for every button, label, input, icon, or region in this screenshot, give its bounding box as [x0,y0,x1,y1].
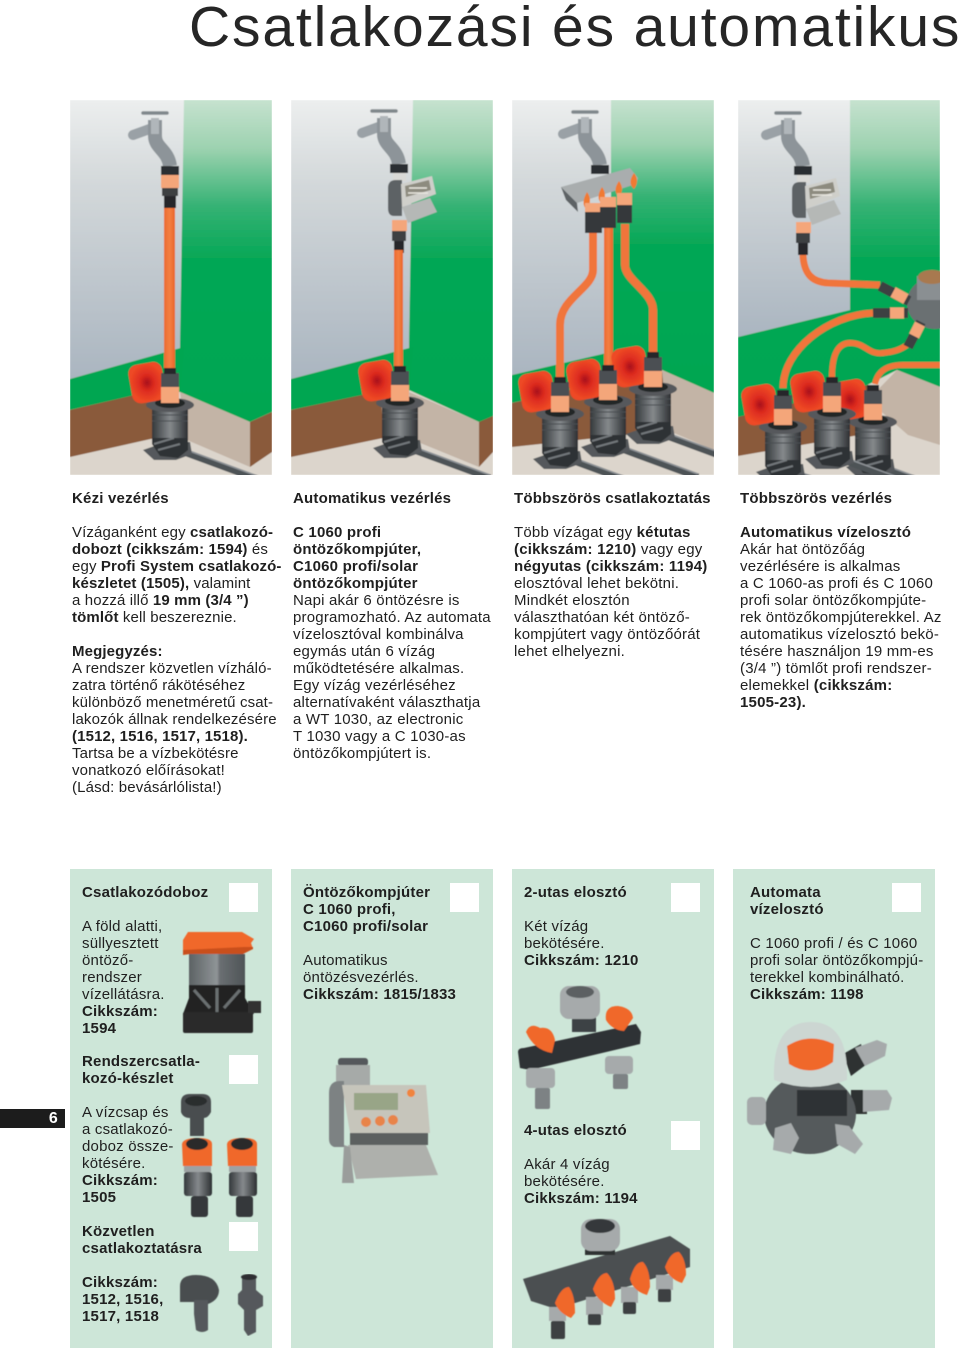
checkbox: direct connection [229,1222,258,1251]
product text: Rendszercsatlakozó-készlet: kozó-készlet [82,1070,174,1087]
text: multiple control: elemekkel (cikkszám: [740,677,892,694]
text: manual control: tömlőt kell beszereznie. [72,609,237,626]
text: manual control: zatra történő rákötéséhez [72,677,245,694]
product image: connector set [180,1093,258,1218]
text: manual control: Tartsa be a vízbekötésre [72,745,239,762]
text: automatic control: öntözőkompjútert is. [293,745,431,762]
text: multiple control [740,524,942,711]
page number tab [0,1109,65,1128]
text: manual control: Vízáganként egy csatlakozó- [72,524,273,541]
product text: Közvetlen csatlakoztatásra: 1517, 1518 [82,1308,159,1325]
product text: Automata vízelosztó: Cikkszám: 1198 [750,986,864,1003]
product text: Automata vízelosztó: vízelosztó [750,901,824,918]
product text: Automata vízelosztó: Automata [750,884,821,901]
text: manual control: A rendszer közvetlen vízháló- [72,660,272,677]
product text: Csatlakozódoboz: A föld alatti, [82,918,162,935]
text: manual control: (Lásd: bevásárlólista!) [72,779,222,796]
checkbox: irrigation computer [450,883,479,912]
text: automatic control: programozható. Az automata [293,609,491,626]
text: multiple connection: (cikkszám: 1210) vagy egy [514,541,702,558]
product text: 4-utas elosztó [524,1122,638,1207]
product text: Automata vízelosztó: terekkel kombinálható. [750,969,904,986]
product text: Közvetlen csatlakoztatásra: Cikkszám: [82,1274,158,1291]
product image: automatic distributor [746,1022,892,1155]
product text: 2-utas elosztó: bekötésére. [524,935,605,952]
product text: Rendszercsatlakozó-készlet: doboz össze- [82,1138,174,1155]
text: multiple connection: elosztóval lehet bekötni. [514,575,679,592]
product image: direct connectors [179,1274,264,1336]
text: manual control: Megjegyzés: [72,643,163,660]
illustration: multiple connection with 4-way manifold [512,100,714,475]
text: manual control: készletet (1505), valamint [72,575,250,592]
product text: 4-utas elosztó: 4-utas elosztó [524,1122,627,1139]
panel: irrigation computer [291,869,493,1348]
text: manual control: vonatkozó előírásokat! [72,762,225,779]
product text: 2-utas elosztó: 2-utas elosztó [524,884,627,901]
panel: connection boxes [70,869,272,1348]
product text: Rendszercsatlakozó-készlet: A vízcsap és [82,1104,169,1121]
product image: connection box [182,931,262,1034]
product text: 4-utas elosztó: Akár 4 vízág [524,1156,610,1173]
panel: automatic distributor [733,869,935,1348]
product text: Rendszercsatlakozó-készlet: 1505 [82,1189,116,1206]
product text: Automata vízelosztó: profi solar öntözőkompjú- [750,952,923,969]
text: multiple connection: Több vízágat egy kétutas [514,524,691,541]
text: automatic control: öntözőkompjúter, [293,541,421,558]
product text: Öntözőkompjúter: C 1060 profi, [303,901,396,918]
product text: Automata vízelosztó: C 1060 profi / és C 1060 [750,935,917,952]
checkbox: connector set [229,1055,258,1084]
product text: Csatlakozódoboz: Csatlakozódoboz [82,884,208,901]
text: multiple control: 1505-23). [740,694,806,711]
text: automatic control: vízelosztóval kombinálva [293,626,464,643]
text: multiple control: (3/4 ”) tömlőt profi rendszer- [740,660,932,677]
product text: Csatlakozódoboz: Cikkszám: [82,1003,158,1020]
heading: manual control: Kézi vezérlés [72,490,169,507]
product text: Öntözőkompjúter: Automatikus [303,952,388,969]
heading: automatic control: Automatikus vezérlés [293,490,451,507]
checkbox: connection box [229,883,258,912]
text: multiple control: Automatikus vízelosztó [740,524,911,541]
text: multiple control: profi solar öntözőkompjúte- [740,592,926,609]
product text: Öntözőkompjúter: öntözésvezérlés. [303,969,419,986]
page number tab: 6 [49,1110,58,1127]
product text: Csatlakozódoboz: öntöző- [82,952,133,969]
product text: Öntözőkompjúter [303,884,456,1003]
product text: Csatlakozódoboz: 1594 [82,1020,116,1037]
product text: Közvetlen csatlakoztatásra: 1512, 1516, [82,1291,163,1308]
text: multiple connection: kompjútert vagy öntözőórát [514,626,700,643]
illustration: automatic control with timer [291,100,493,475]
product text: 2-utas elosztó: Két vízág [524,918,588,935]
text: multiple control: Akár hat öntözőág [740,541,865,558]
illustration: manual control with single hose [70,100,272,475]
checkbox: 2-way distributor [671,883,700,912]
text: automatic control: a WT 1030, az electronic [293,711,463,728]
text: automatic control: C 1060 profi [293,524,381,541]
text: multiple control: a C 1060-as profi és C 1060 [740,575,933,592]
product image: 2-way distributor [517,985,642,1110]
product text: Rendszercsatlakozó-készlet: a csatlakozó- [82,1121,173,1138]
heading: multiple control: Többszörös vezérlés [740,490,892,507]
product text: Csatlakozódoboz: vízellátásra. [82,986,165,1003]
product text: Rendszercsatlakozó-készlet: Rendszercsatla- [82,1053,200,1070]
text: manual control: dobozt (cikkszám: 1594) és [72,541,268,558]
product text: Közvetlen csatlakoztatásra: Közvetlen [82,1223,155,1240]
product text: Csatlakozódoboz: rendszer [82,969,142,986]
text: manual control: egy Profi System csatlakozó- [72,558,282,575]
product text: 2-utas elosztó [524,884,639,969]
text: automatic control: T 1030 vagy a C 1030-as [293,728,466,745]
text: automatic control [293,524,491,762]
product text: Öntözőkompjúter: Cikkszám: 1815/1833 [303,986,456,1003]
text: automatic control: egymás után 6 vízág [293,643,435,660]
text: multiple connection: Mindkét elosztón [514,592,630,609]
product text: Rendszercsatlakozó-készlet [82,1053,200,1206]
heading: multiple connection: Többszörös csatlakoztatás [514,490,711,507]
text: manual control: a hozzá illő 19 mm (3/4 ”) [72,592,249,609]
product text: Öntözőkompjúter: C1060 profi/solar [303,918,428,935]
product text: Öntözőkompjúter: Öntözőkompjúter [303,884,430,901]
text: multiple control: rek öntözőkompjúterekkel. Az [740,609,942,626]
product text: Csatlakozódoboz: süllyesztett [82,935,159,952]
text: multiple control: vezérlésére is alkalmas [740,558,900,575]
text: automatic control: öntözőkompjúter [293,575,418,592]
checkbox: 4-way distributor [671,1121,700,1150]
text: automatic control: alternatívaként választhatja [293,694,480,711]
product text: 4-utas elosztó: bekötésére. [524,1173,605,1190]
text: manual control: lakozók állnak rendelkezésére [72,711,277,728]
text: multiple control: automatikus vízelosztó bekö- [740,626,939,643]
text: automatic control: működtetésére alkalmas. [293,660,464,677]
product image: irrigation computer [328,1057,438,1184]
text: multiple control: tésére használjon 19 mm-es [740,643,934,660]
product image: 4-way distributor [522,1218,691,1340]
text: multiple connection: négyutas (cikkszám: 1194) [514,558,707,575]
product text: Közvetlen csatlakoztatásra [82,1223,202,1325]
text: manual control: különböző menetméretű csat- [72,694,273,711]
text: multiple connection: választhatóan két öntöző- [514,609,690,626]
product text: Rendszercsatlakozó-készlet: kötésére. [82,1155,146,1172]
checkbox: automatic distributor [892,883,921,912]
text: manual control [72,524,282,796]
product text: Rendszercsatlakozó-készlet: Cikkszám: [82,1172,158,1189]
illustration: multiple control with automatic distributor [738,100,940,475]
text: automatic control: Egy vízág vezérléséhez [293,677,456,694]
text: automatic control: Napi akár 6 öntözésre is [293,592,460,609]
panel: distributors [512,869,714,1348]
product text: 4-utas elosztó: Cikkszám: 1194 [524,1190,638,1207]
text: manual control: (1512, 1516, 1517, 1518). [72,728,248,745]
text: multiple connection [514,524,707,660]
text: automatic control: C1060 profi/solar [293,558,418,575]
text: multiple connection: lehet elhelyezni. [514,643,625,660]
product text: 2-utas elosztó: Cikkszám: 1210 [524,952,639,969]
product text: Közvetlen csatlakoztatásra: csatlakoztatásra [82,1240,202,1257]
product text: Csatlakozódoboz [82,884,208,1037]
product text: Automata vízelosztó [750,884,923,1003]
